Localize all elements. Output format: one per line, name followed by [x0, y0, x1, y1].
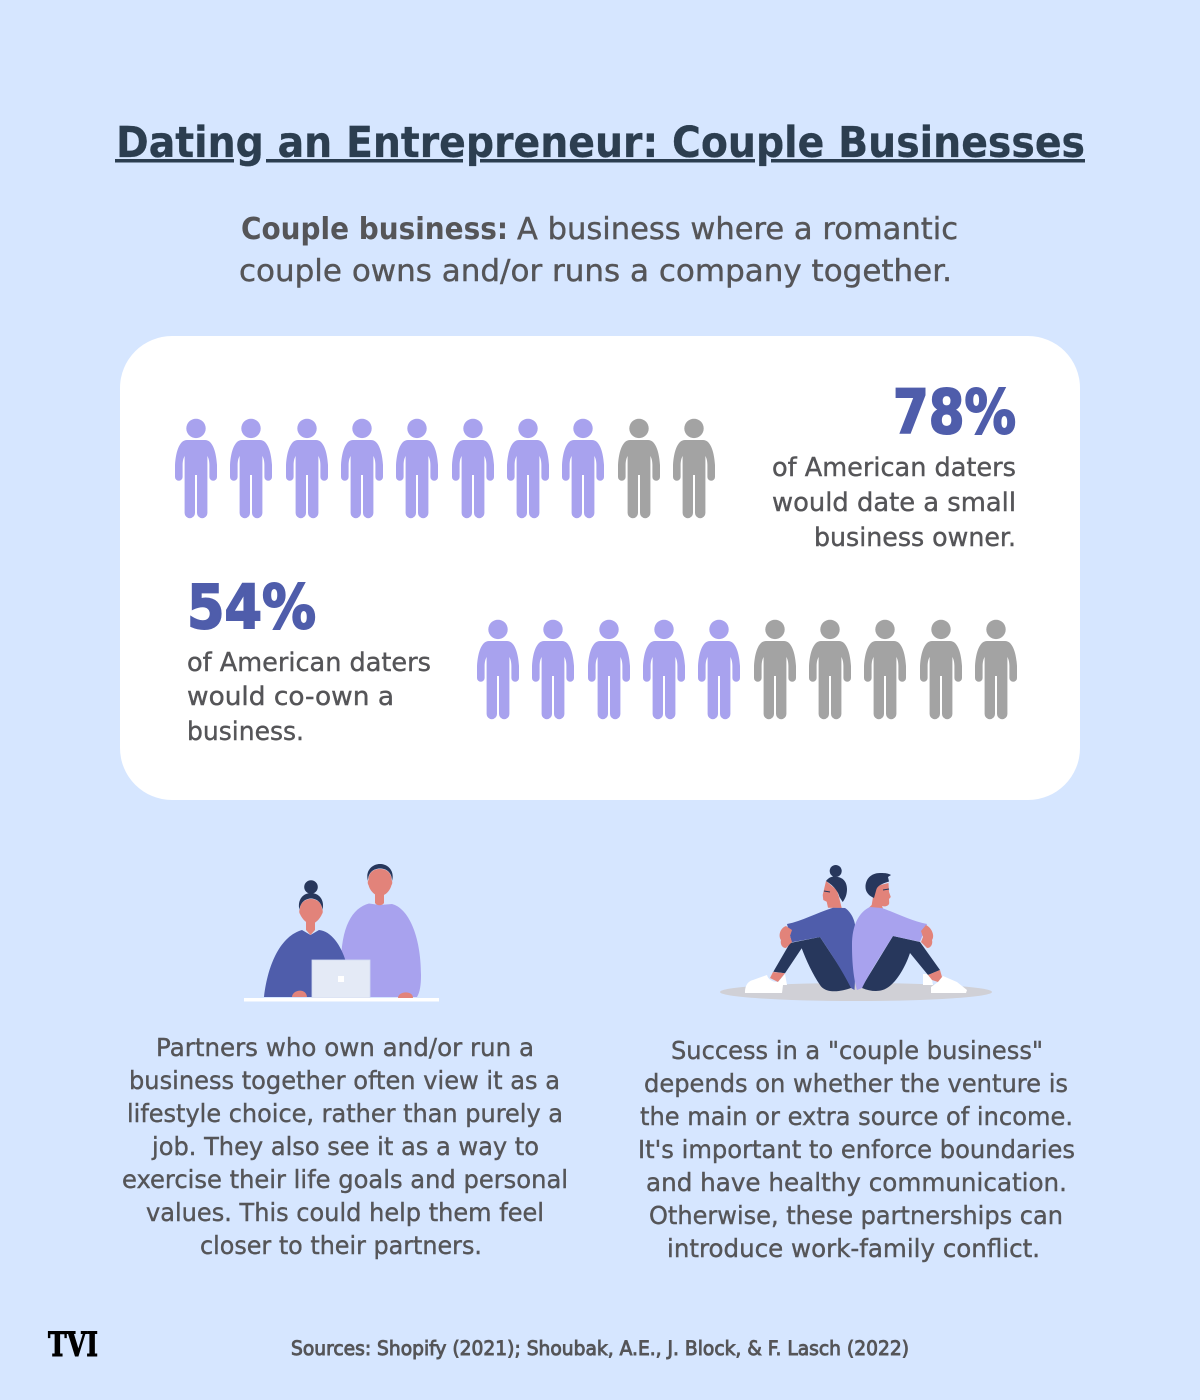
- woman: [264, 880, 346, 997]
- panel: statistics card: [120, 336, 1080, 800]
- sources: Sources: Shopify (2021); Shoubak, A.E., J. Block, & F. Lasch (2022): [291, 1337, 909, 1360]
- text block: right paragraph: the main or extra source of income.: [640, 1102, 1073, 1131]
- pictogram: 78 percent row: [175, 419, 715, 518]
- definition text: Couple business:: [241, 212, 508, 247]
- text block: right paragraph: Success in a "couple business": [671, 1036, 1043, 1065]
- laptop: [312, 960, 370, 998]
- man: [341, 864, 421, 997]
- stat: 78 percent: 78%: [893, 377, 1016, 448]
- text block: left paragraph: exercise their life goals and personal: [122, 1165, 568, 1194]
- text block: right paragraph: It's important to enforce boundaries: [638, 1135, 1075, 1164]
- ground shadow: [720, 983, 992, 1001]
- pictogram: 54 percent row: [477, 620, 1017, 719]
- desk: [244, 998, 439, 1002]
- definition text: [239, 212, 958, 289]
- text block: right paragraph: depends on whether the venture is: [644, 1069, 1068, 1098]
- text block: left paragraph: business together often view it as a: [129, 1066, 560, 1095]
- stat: 78 percent: would date a small: [772, 488, 1016, 518]
- woman: [745, 865, 856, 993]
- hands: [292, 991, 413, 998]
- text block: right paragraph: and have healthy communication.: [646, 1168, 1067, 1197]
- text block: left paragraph: values. This could help them feel: [146, 1198, 544, 1227]
- stat: 78 percent: of American daters: [772, 453, 1016, 483]
- text block: left paragraph: closer to their partners.: [200, 1231, 482, 1260]
- illustration: couple sitting back to back: [720, 865, 992, 1001]
- stat: 54 percent: [187, 572, 431, 747]
- stat: 54 percent: of American daters: [187, 648, 431, 678]
- stat: 54 percent: business.: [187, 717, 304, 747]
- stat: 54 percent: 54%: [187, 572, 316, 643]
- text block: left paragraph: lifestyle choice, rather than purely a: [127, 1099, 563, 1128]
- text block: right paragraph: [638, 1036, 1075, 1263]
- text block: left paragraph: Partners who own and/or run a: [156, 1033, 534, 1062]
- stat: 78 percent: [772, 377, 1016, 553]
- logo: TVI: [48, 1325, 98, 1365]
- text block: left paragraph: job. They also see it as a way to: [151, 1132, 539, 1161]
- definition text: couple owns and/or runs a company together.: [239, 254, 952, 289]
- illustration: couple at a laptop: [244, 864, 439, 1002]
- man: [852, 873, 967, 993]
- title: Dating an Entrepreneur: Couple Businesses: [116, 118, 1085, 168]
- text block: right paragraph: introduce work-family conflict.: [667, 1234, 1040, 1263]
- stat: 54 percent: would co-own a: [187, 682, 394, 712]
- definition text: A business where a romantic: [517, 212, 958, 247]
- text block: left paragraph: [122, 1033, 568, 1260]
- text block: right paragraph: Otherwise, these partnerships can: [649, 1201, 1063, 1230]
- stat: 78 percent: business owner.: [814, 523, 1016, 553]
